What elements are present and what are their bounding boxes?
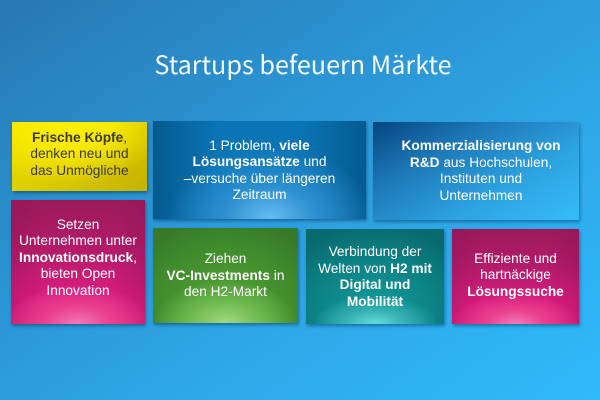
panel: Innovationsdruck: Innovationsdruck, bbox=[19, 250, 137, 265]
panel: Kommerzialisierung von R&D: R&D aus Hochschulen, bbox=[410, 154, 552, 170]
panel: Innovationsdruck: Setzen bbox=[57, 217, 99, 232]
panel: Innovationsdruck: Innovation bbox=[46, 283, 110, 298]
panel: H2, Digital und Mobilität bbox=[306, 229, 444, 324]
panel: viele Lösungsansätze: Lösungsansätze und bbox=[193, 154, 326, 169]
panel: Lösungssuche: Lösungssuche bbox=[467, 284, 564, 299]
panel: Lösungssuche bbox=[452, 229, 579, 324]
panel: Frische Köpfe: das Unmögliche bbox=[30, 163, 129, 178]
panel: Kommerzialisierung von R&D: Kommerzialisierung von bbox=[402, 138, 560, 153]
panel: Kommerzialisierung von R&D: Instituten und bbox=[440, 171, 522, 186]
panel: VC-Investments bbox=[153, 228, 298, 323]
title: Startups befeuern Märkte bbox=[154, 46, 452, 82]
panel: Innovationsdruck: bieten Open bbox=[41, 266, 115, 281]
panel: Frische Köpfe bbox=[12, 122, 147, 191]
panel: viele Lösungsansätze: 1 Problem, viele bbox=[209, 138, 310, 152]
panel: H2, Digital und Mobilität: Mobilität bbox=[347, 294, 403, 308]
panel: Lösungssuche: hartnäckige bbox=[480, 267, 551, 282]
panel: Lösungssuche: Effiziente und bbox=[474, 251, 557, 266]
panel: Kommerzialisierung von R&D bbox=[373, 122, 579, 220]
panel: VC-Investments: den H2-Markt bbox=[184, 284, 267, 299]
panel: Innovationsdruck: Unternehmen unter bbox=[19, 233, 137, 248]
panel: H2, Digital und Mobilität: Welten von H2 mit bbox=[318, 260, 432, 276]
panel: Innovationsdruck bbox=[11, 200, 145, 324]
panel: VC-Investments: Ziehen bbox=[205, 251, 246, 266]
panel: viele Lösungsansätze: Zeitraum bbox=[232, 187, 286, 202]
panel: H2, Digital und Mobilität: Digital und bbox=[340, 277, 410, 292]
panel: Frische Köpfe: denken neu und bbox=[30, 146, 129, 161]
panel: viele Lösungsansätze: –versuche über längeren bbox=[184, 170, 335, 186]
panel: Kommerzialisierung von R&D: Unternehmen bbox=[440, 188, 522, 202]
panel: H2, Digital und Mobilität: Verbindung der bbox=[329, 244, 421, 259]
panel: Frische Köpfe: Frische Köpfe, bbox=[32, 130, 127, 145]
panel: VC-Investments: VC-Investments in bbox=[167, 268, 284, 283]
panel: viele Lösungsansätze bbox=[153, 121, 366, 219]
